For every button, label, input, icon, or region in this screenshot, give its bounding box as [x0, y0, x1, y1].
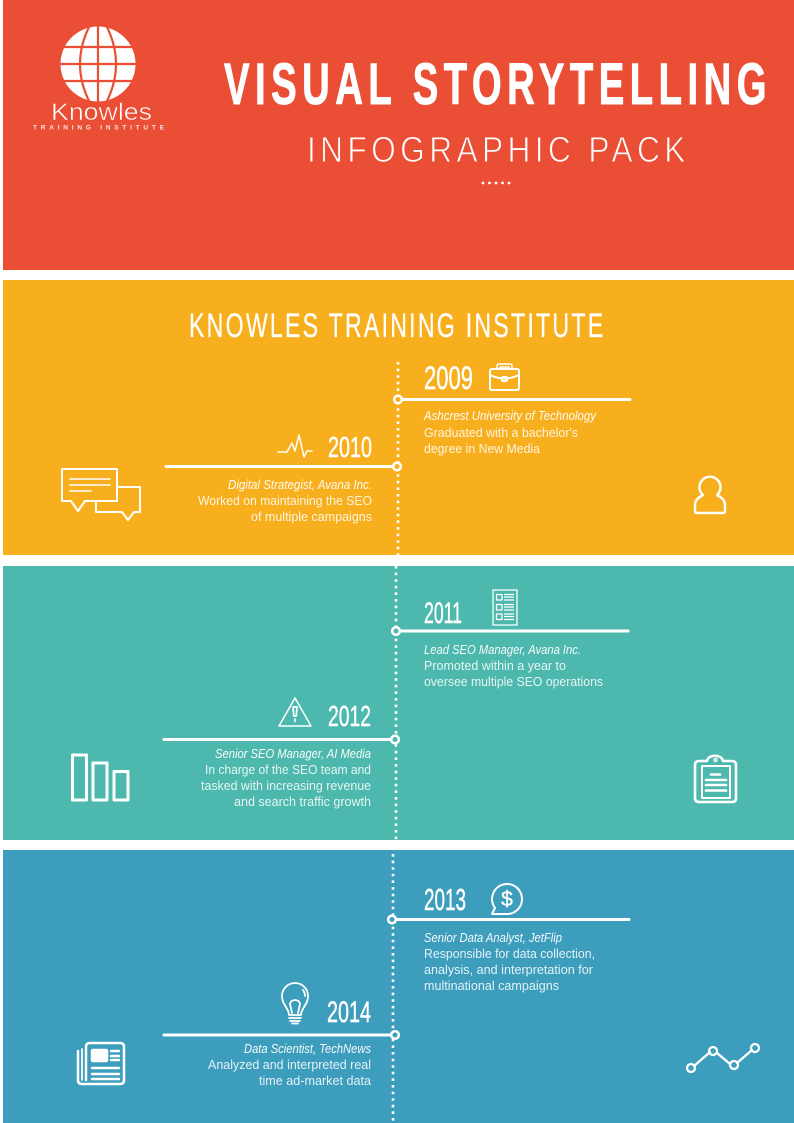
milestone 2012: 2012	[328, 701, 371, 733]
milestone 2009: Graduated with a bachelor's	[424, 425, 578, 440]
milestone 2013: 2013	[424, 882, 466, 917]
milestone 2010: 2010	[328, 432, 372, 464]
milestone 2009: Ashcrest University of Technology	[423, 408, 597, 423]
milestone 2013: Senior Data Analyst, JetFlip	[424, 930, 562, 945]
panel: blue 2013-2014	[3, 850, 794, 1123]
milestone 2011: oversee multiple SEO operations	[424, 674, 603, 689]
milestone 2012	[164, 698, 399, 809]
icon: clipboard	[695, 756, 736, 802]
icon: speech bubbles	[62, 469, 140, 520]
milestone 2011: Promoted within a year to	[424, 658, 566, 673]
icon: form list	[493, 590, 517, 625]
milestone 2013	[388, 882, 629, 993]
milestone 2011: Lead SEO Manager, Avana Inc.	[424, 642, 581, 657]
icon: dollar speech bubble: $	[501, 888, 513, 911]
milestone 2013: Responsible for data collection,	[424, 946, 595, 961]
milestone 2014: 2014	[327, 996, 371, 1029]
icon: bar chart	[72, 755, 128, 800]
panel: teal 2011-2012	[3, 566, 794, 840]
milestone 2012: and search traffic growth	[234, 794, 371, 809]
milestone 2009	[394, 360, 630, 456]
icon: pulse	[278, 435, 312, 457]
milestone 2014: Data Scientist, TechNews	[244, 1041, 371, 1056]
icon: warning triangle	[279, 698, 311, 726]
icon: line chart	[687, 1044, 759, 1072]
milestone 2014: Analyzed and interpreted real	[208, 1057, 371, 1072]
panel: header	[3, 0, 794, 270]
milestone 2011: 2011	[424, 597, 462, 630]
icon: newspaper	[78, 1043, 124, 1084]
milestone 2012: tasked with increasing revenue	[201, 778, 371, 793]
title: VISUAL STORYTELLING	[224, 53, 767, 117]
milestone 2014: time ad-market data	[259, 1073, 372, 1088]
subtitle: INFOGRAPHIC PACK	[307, 130, 686, 170]
logo: Knowles Training Institute	[33, 25, 165, 132]
milestone 2014	[164, 983, 399, 1088]
decorative dots	[482, 182, 510, 184]
milestone 2012: In charge of the SEO team and	[205, 762, 371, 777]
milestone 2013: multinational campaigns	[424, 978, 559, 993]
milestone 2012: Senior SEO Manager, AI Media	[215, 746, 371, 761]
icon: dollar speech bubble	[492, 884, 522, 914]
milestone 2011	[392, 590, 628, 689]
milestone 2009: 2009	[424, 360, 473, 396]
icon: briefcase	[490, 364, 519, 390]
milestone 2010	[166, 432, 401, 524]
logo: Knowles Training Institute: TRAINING INSTITUTE	[33, 124, 165, 132]
milestone 2010: Worked on maintaining the SEO	[198, 493, 372, 508]
logo: Knowles Training Institute: Knowles	[51, 99, 152, 126]
panel: yellow 2009-2010	[3, 280, 794, 555]
milestone 2013: analysis, and interpretation for	[424, 962, 594, 977]
milestone 2010: Digital Strategist, Avana Inc.	[228, 477, 372, 492]
icon: light bulb	[282, 983, 308, 1024]
section heading: KNOWLES TRAINING INSTITUTE	[189, 308, 603, 345]
milestone 2009: degree in New Media	[424, 441, 541, 456]
milestone 2010: of multiple campaigns	[251, 509, 372, 524]
icon: person	[695, 477, 725, 513]
